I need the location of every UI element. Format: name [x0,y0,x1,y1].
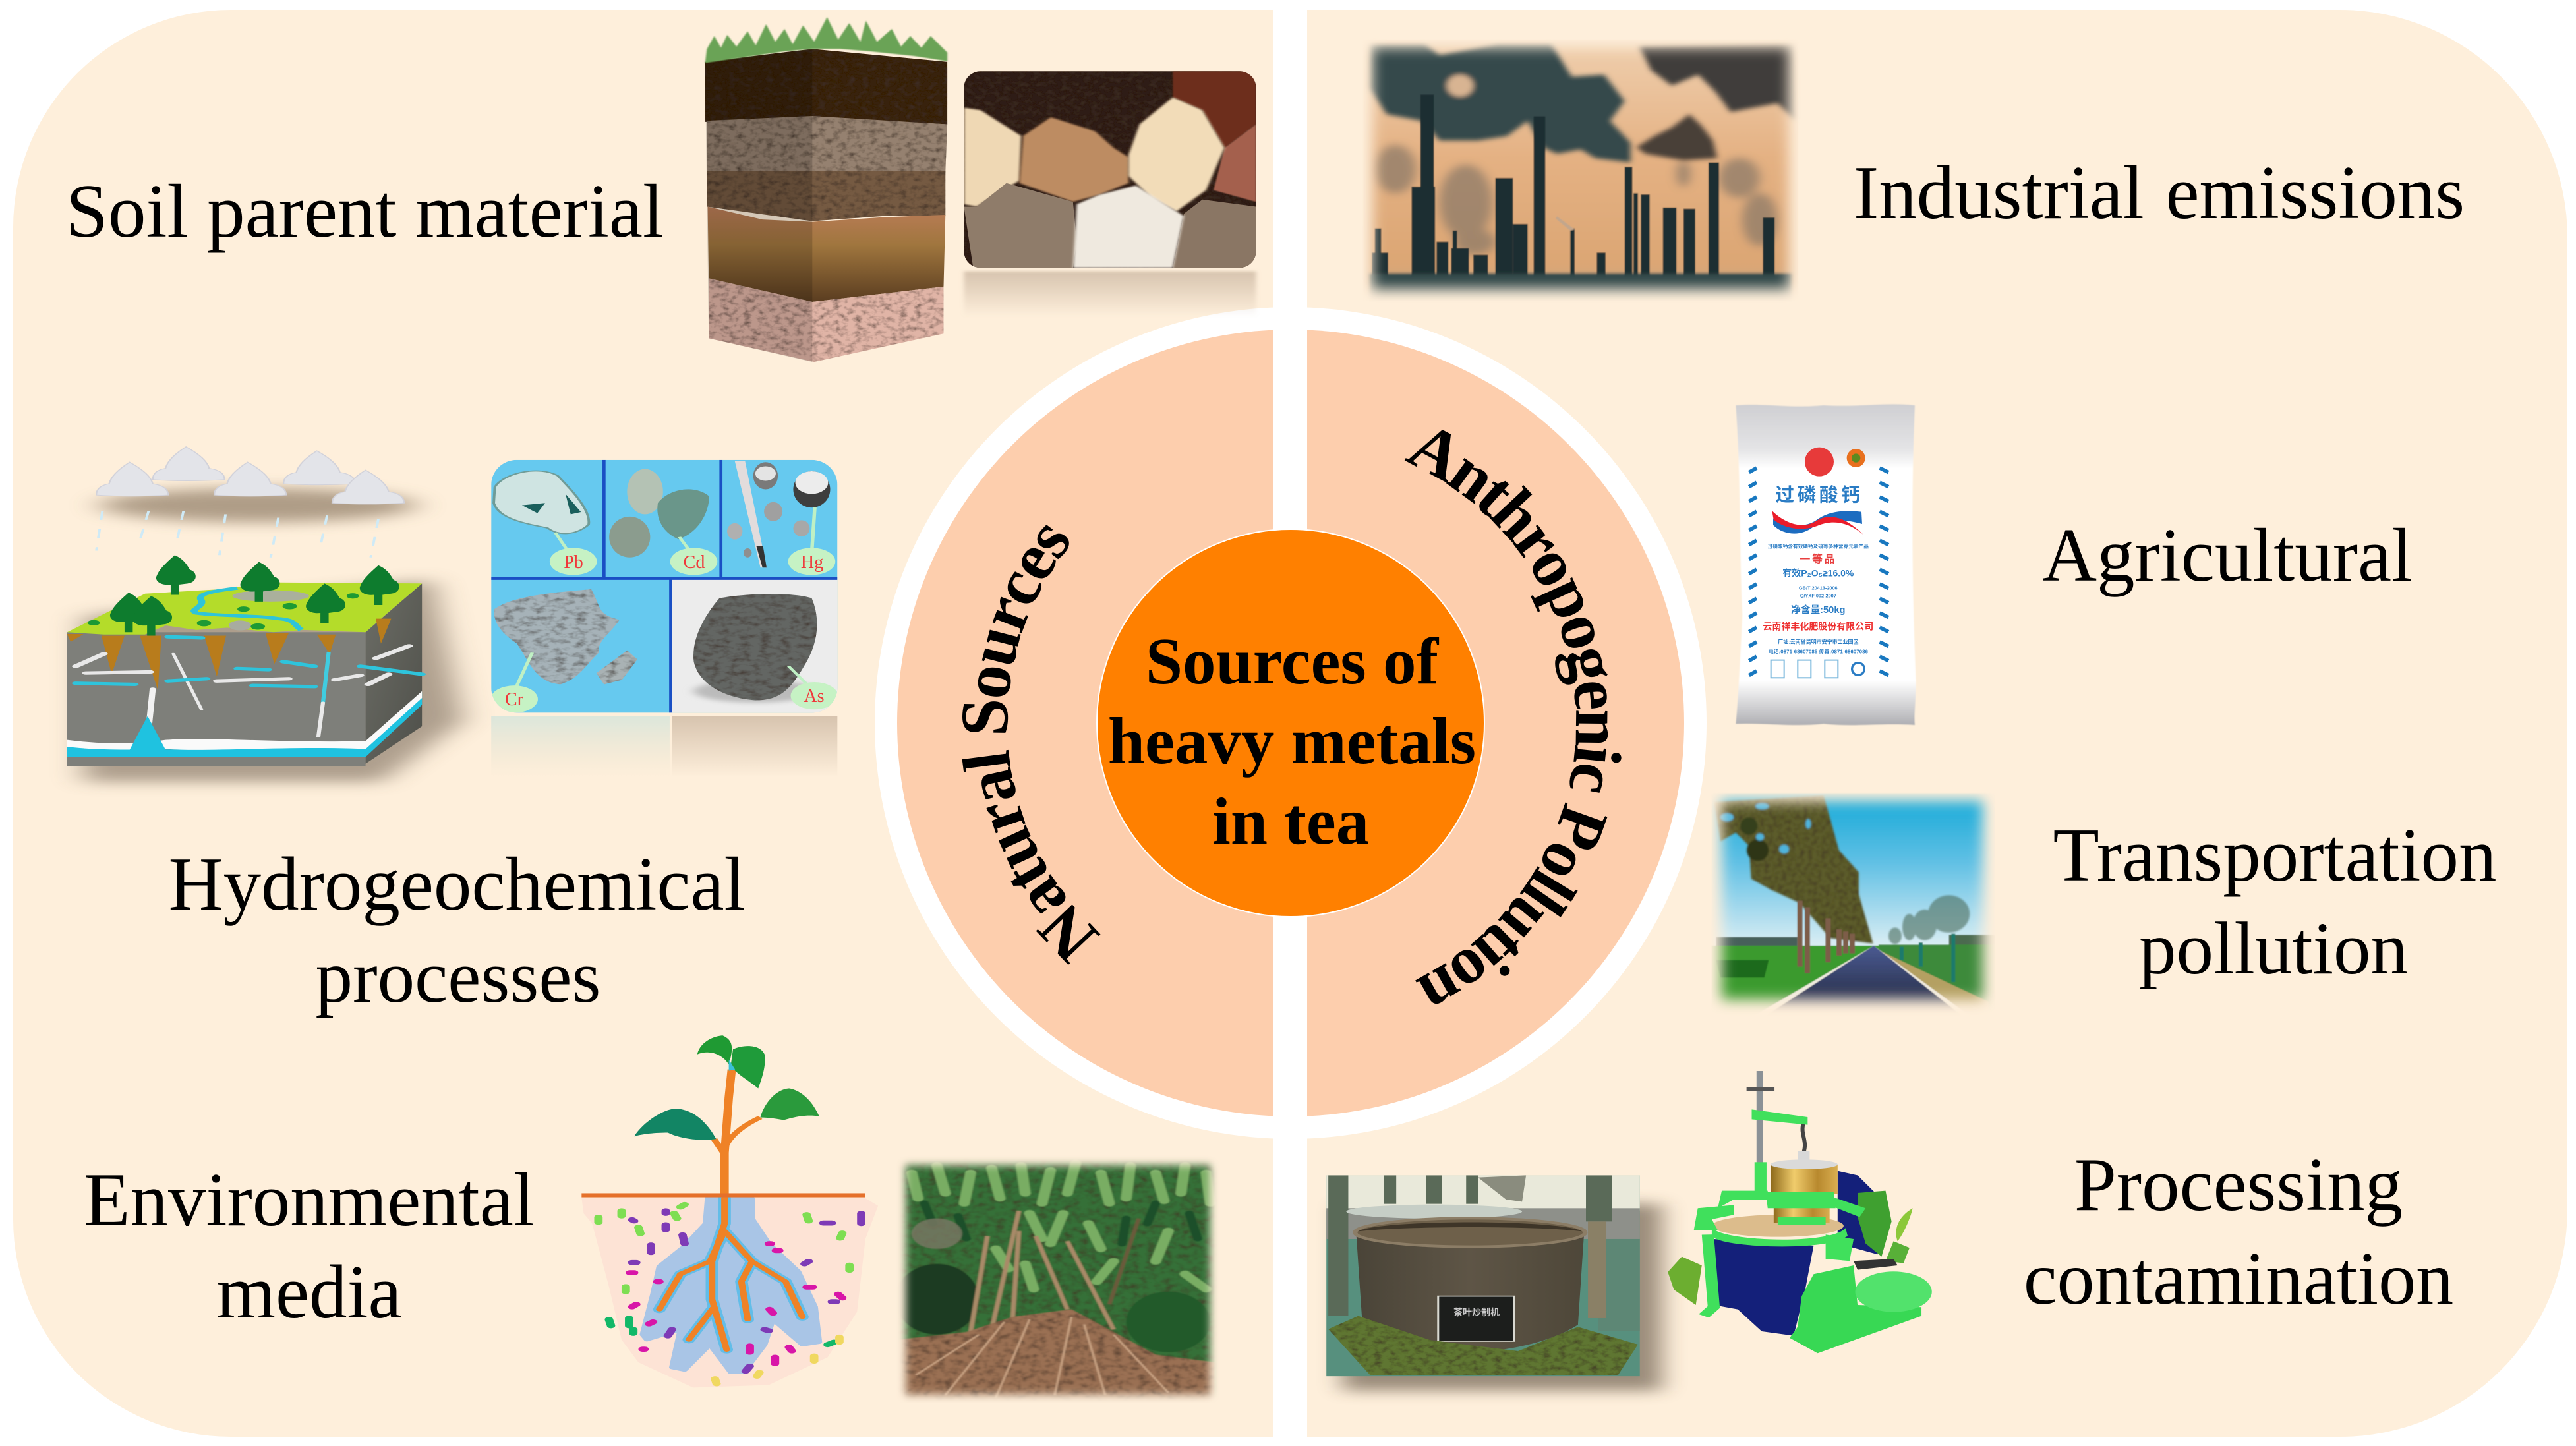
element tags: Cr [505,689,524,710]
white vertical divider [1273,0,1307,1446]
central white ring [875,307,1707,1139]
half ring: natural sources [897,330,1273,1116]
image: fertilizer bag: 一等品 [1800,552,1836,565]
element tags [505,552,825,710]
leaves [697,1035,732,1064]
bag text: 过磷酸钙 [1775,485,1863,506]
frame legs [1704,1234,1714,1316]
side face [366,583,422,764]
nameplate [1438,1296,1514,1341]
upper foliage [912,1163,1210,1289]
dark undergrowth [895,1264,979,1335]
image: plant roots in rhizosphere [581,1035,878,1387]
metal Hg [735,461,767,567]
image: tea roasting pot photo [1326,1175,1662,1391]
leaves [1668,1191,1913,1305]
stems [970,1211,1113,1332]
left tree crowns [1714,795,1873,944]
label: processing contamination: contamination [2024,1236,2453,1320]
stem [724,1070,732,1196]
rhizosphere halo [643,1198,819,1372]
image: hydrogeological block [67,447,463,782]
nameplate text: 茶叶炒制机 [1453,1307,1500,1317]
reflection [964,272,1256,317]
label: processing contamination: Processing [2074,1143,2403,1227]
metal Cr [494,589,620,684]
distant treeline [1716,937,1798,947]
image: soil samples photo [964,71,1256,317]
logos [1805,448,1834,477]
center title: heavy metals [1108,704,1476,778]
navy back panel [1838,1171,1886,1254]
metal Pb [494,471,589,534]
label: soil parent material: Soil parent material [66,169,664,253]
root mound [895,1310,1215,1403]
element tags: Pb [564,552,583,573]
clouds [96,447,404,504]
pole and rope [1755,1071,1765,1167]
label: agricultural: Agricultural [2042,513,2413,597]
label: environmental media: media [216,1250,402,1334]
image: fertilizer bag: 过磷酸钙含有效磷钙及硫等多种营养元素产品 [1768,543,1869,550]
image: fertilizer bag: 厂址:云南省昆明市安宁市工业园区 [1778,639,1859,645]
roots [659,1198,802,1350]
label: hydrogeochemical processes: processes [315,936,601,1018]
rain [96,511,378,558]
trunks [1800,901,1852,973]
label: transportation pollution: Transportation [2053,813,2497,897]
image: fertilizer bag: 有效P₂O₅≥16.0% [1782,568,1854,579]
center circle [1097,529,1484,917]
curved heading: anthropogenic pollution: Anthropogenic Pollution [1404,430,1622,1004]
cloud haze [99,488,417,522]
road [1745,946,1977,1022]
panel: natural sources background [13,10,1273,1437]
top surface [67,583,422,635]
leader lines [514,507,815,691]
curved heading: natural sources: Natural Sources [962,525,1101,965]
element tags: As [804,686,825,707]
image: soil profile column [705,17,947,362]
plant base [1369,274,1792,301]
fields [1712,946,1879,1016]
center title: in tea [1212,784,1369,858]
smoke [1369,44,1797,163]
soil zone [581,1198,878,1387]
underground water band [67,692,422,757]
pot body [1357,1234,1584,1352]
image: fertilizer bag: Q/YXF 002-2007 [1800,593,1836,599]
shrubs [88,593,359,629]
bowl [1712,1215,1844,1237]
posts and fixtures [1328,1175,1612,1316]
image: fertilizer bag: GB/T 20413-2006 [1799,585,1838,591]
trees [110,555,399,635]
metal Cd [627,469,663,514]
element tag bubbles [490,548,838,712]
microbes [599,1205,862,1384]
right trees [1888,895,1970,944]
collar and gold ring [1774,1207,1830,1223]
front face [67,632,366,766]
label: hydrogeochemical processes: Hydrogeochemical [169,842,745,926]
image: fertilizer bag: 净含量:50kg [1791,604,1845,616]
motor [1855,1271,1932,1312]
center title: Sources of [1146,624,1439,698]
block shadow [84,580,463,782]
navy barrel [1714,1239,1813,1336]
drum [1771,1165,1838,1194]
panel: anthropogenic background [1307,10,2567,1437]
river [194,588,301,630]
image: fertilizer bag: 云南祥丰化肥股份有限公司 [1763,621,1873,631]
side stripes [1749,468,1888,676]
label: environmental media: Environmental [84,1158,535,1242]
label: industrial emissions: Industrial emissions [1854,151,2465,235]
tea leaves [1328,1316,1638,1375]
image: heavy metal samples grid [490,460,838,777]
image: tea seedlings photo [895,1155,1221,1403]
element tags: Hg [801,552,823,573]
stacks [1372,94,1774,290]
metal As [693,680,817,703]
image: fertilizer bag: 电话:0871-68607085 传真:0871-68607086 [1769,649,1869,655]
image: tea rolling machine [1668,1071,1932,1353]
ground line [581,1193,865,1198]
wave graphic [1773,511,1862,534]
light haze [1375,145,1778,255]
image: tree-lined road photo [1712,793,1995,1022]
element tags: Cd [684,552,705,573]
half ring: anthropogenic pollution [1307,330,1684,1116]
reflection [491,716,670,777]
rock strata and water [76,637,422,739]
orange roots [67,619,391,690]
label: transportation pollution: pollution [2139,908,2408,990]
image: factory smokestacks photo [1363,40,1798,301]
image: fertilizer bag [1736,404,1916,725]
